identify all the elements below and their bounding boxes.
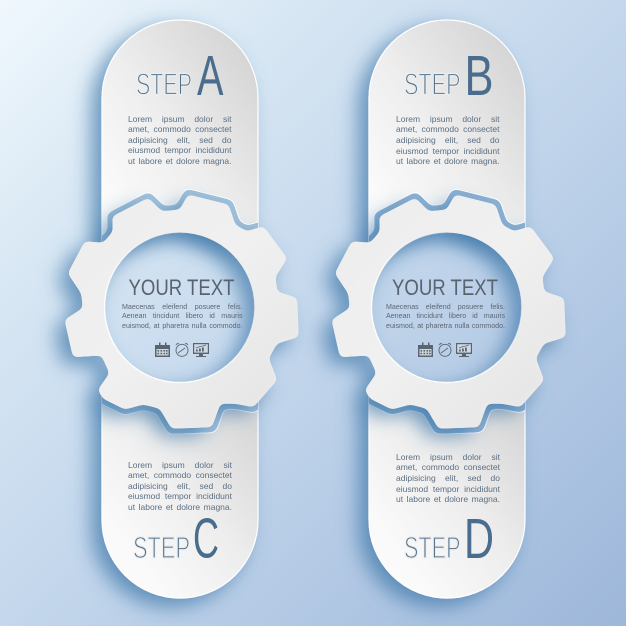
text block: step D: eiusmod tempor incididunt xyxy=(396,484,500,494)
panel: right pill and gear xyxy=(332,20,565,598)
panel: step B card xyxy=(369,20,525,250)
gear hole rim xyxy=(104,232,254,382)
heading: your text right: YOUR TEXT xyxy=(392,275,498,300)
text block: step D: adipisicing elit, sed do xyxy=(396,473,500,483)
heading: your text left: YOUR TEXT xyxy=(128,275,235,300)
text block: step A: amet, commodo consectet xyxy=(128,124,232,134)
panel: step C card xyxy=(102,392,258,598)
text block: step C: Lorem ipsum dolor sit xyxy=(128,460,232,470)
text block: left gear: Maecenas eleifend posuere felis. xyxy=(122,303,242,311)
text block: step B: Lorem ipsum dolor sit xyxy=(396,114,500,124)
text block: left gear: Aenean tincidunt libero id mauris xyxy=(122,312,242,320)
text block: step D: ut labore et dolore magna. xyxy=(396,494,500,504)
icons: right gear xyxy=(418,342,472,357)
text block: step B: amet, commodo consectet xyxy=(396,124,500,134)
heading: step B xyxy=(404,44,494,108)
text block: step C: amet, commodo consectet xyxy=(128,470,232,480)
text block: step A: adipisicing elit, sed do xyxy=(128,135,232,145)
text block: step C: adipisicing elit, sed do xyxy=(128,481,232,491)
text block: right gear: Aenean tincidunt libero id mauris xyxy=(386,312,505,320)
gear cut-out outline xyxy=(102,189,258,434)
text block: step A: eiusmod tempor incididunt xyxy=(128,145,232,155)
icon: monitor chart xyxy=(193,343,209,357)
text block: step A: Lorem ipsum dolor sit xyxy=(128,114,232,124)
text block: right gear xyxy=(386,303,505,333)
text block: step C: eiusmod tempor incididunt xyxy=(128,491,232,501)
gear cut-out outline xyxy=(369,189,525,434)
panel: step D card xyxy=(369,392,525,598)
heading: step A xyxy=(136,44,224,108)
icon: calendar xyxy=(418,342,433,357)
panel: step A card xyxy=(102,20,258,250)
text block: step B: adipisicing elit, sed do xyxy=(396,135,500,145)
gear hole rim xyxy=(372,232,522,382)
heading: step A: A xyxy=(197,44,224,108)
text block: right gear: Maecenas eleifend posuere felis. xyxy=(386,303,505,311)
heading: step D: STEP xyxy=(404,530,460,565)
icon: alarm clock xyxy=(438,343,452,356)
text block: step D: Lorem ipsum dolor sit xyxy=(396,452,500,462)
text block: left gear xyxy=(122,303,242,333)
heading: step D: D xyxy=(464,507,494,571)
icons: left gear xyxy=(155,342,209,357)
icon: calendar xyxy=(155,342,170,357)
text block: step B: ut labore et dolore magna. xyxy=(396,156,500,166)
heading: step B: STEP xyxy=(404,66,460,102)
icon: monitor chart xyxy=(456,343,472,357)
heading: step B: B xyxy=(464,44,494,108)
text block: right gear: euismod, at pharetra nulla commodo. xyxy=(386,322,505,330)
text block: step D xyxy=(396,452,500,508)
heading: step C: C xyxy=(193,506,219,570)
heading: step D xyxy=(404,507,494,571)
icon: alarm clock xyxy=(176,343,188,356)
text block: step C: ut labore et dolore magna. xyxy=(128,502,232,512)
heading: step C: STEP xyxy=(133,530,190,565)
text block: step D: amet, commodo consectet xyxy=(396,462,500,472)
gear: right xyxy=(332,195,565,428)
text block: step B: eiusmod tempor incididunt xyxy=(396,146,500,156)
text block: step A: ut labore et dolore magna. xyxy=(128,156,232,166)
panel: left pill and gear xyxy=(65,20,298,598)
text block: left gear: euismod, at pharetra nulla commodo. xyxy=(122,322,242,330)
text block: step C xyxy=(128,460,232,516)
text block: step B xyxy=(396,114,500,170)
gear: left xyxy=(65,195,298,428)
text block: step A xyxy=(128,114,232,170)
heading: step C xyxy=(133,506,219,570)
heading: step A: STEP xyxy=(136,66,192,102)
